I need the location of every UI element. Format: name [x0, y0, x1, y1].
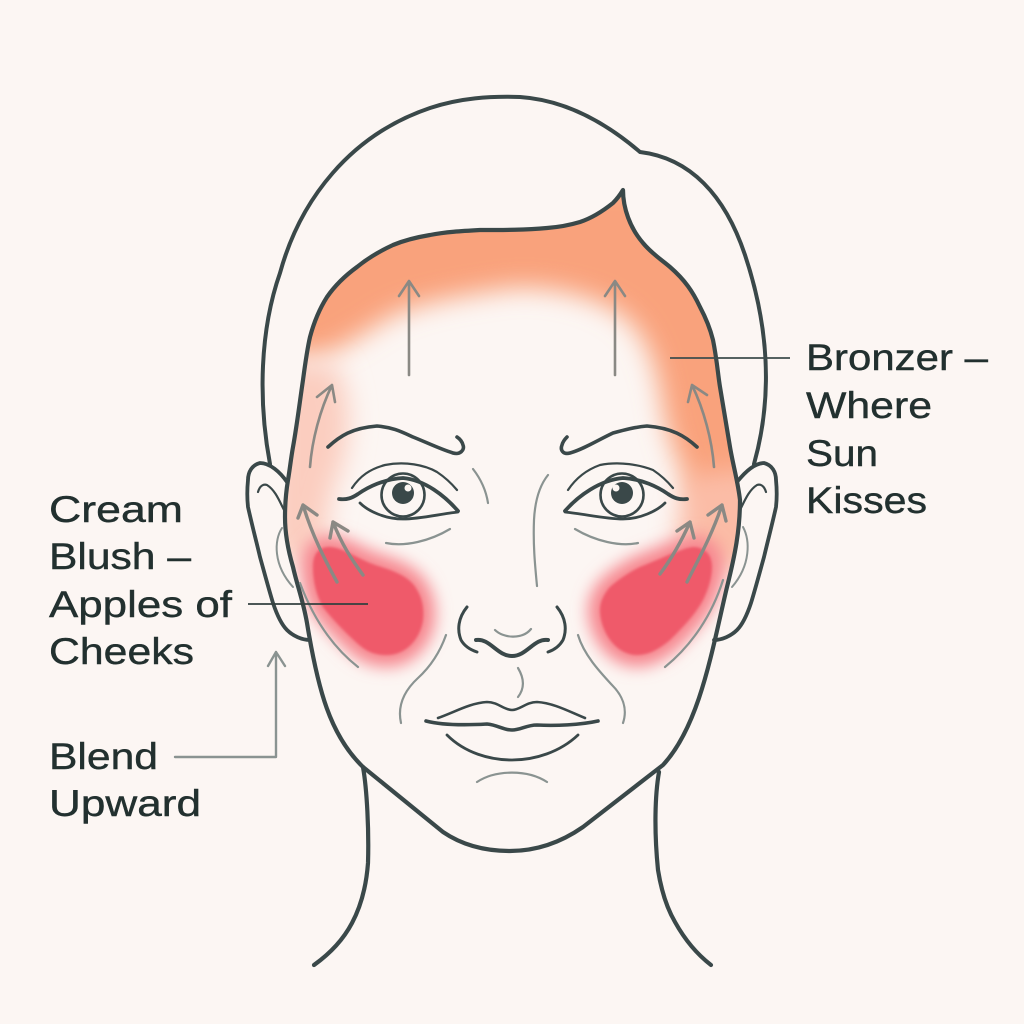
label: bronzer: Bronzer –	[806, 337, 988, 378]
nose	[459, 607, 565, 656]
label: blend upward: Upward	[49, 783, 201, 824]
left eye	[339, 463, 458, 519]
face outline	[285, 190, 740, 851]
label: blend upward	[49, 736, 201, 824]
bronzer zone: forehead and temples	[287, 196, 738, 582]
under-eye and nose-side lines	[300, 469, 723, 782]
blush halo left	[313, 547, 423, 655]
leader line: cream blush	[248, 603, 368, 605]
label: cream blush	[49, 489, 233, 672]
blush halo right	[600, 547, 712, 655]
label: blend upward: Blend	[49, 736, 158, 777]
right eyebrow	[561, 426, 697, 453]
leader line: bronzer	[670, 357, 790, 359]
label: bronzer: Where	[806, 385, 932, 426]
neck	[314, 767, 711, 965]
label: bronzer: Sun	[806, 433, 878, 474]
label: cream blush: Cream	[49, 489, 183, 530]
lips	[426, 702, 598, 760]
blush arrows: cheeks to temples	[298, 505, 726, 582]
left eyebrow	[328, 426, 463, 453]
bronzer arrows: forehead and temples	[310, 281, 714, 467]
cream blush right	[600, 547, 712, 655]
arrow: blend upward	[175, 652, 285, 757]
label: cream blush: Blush –	[49, 536, 191, 577]
hair outline	[263, 97, 766, 464]
cream blush left	[313, 547, 423, 655]
label: bronzer: Kisses	[806, 480, 927, 521]
label: bronzer	[806, 337, 988, 521]
right ear	[714, 463, 777, 640]
label: cream blush: Cheeks	[49, 631, 194, 672]
left ear	[247, 463, 310, 640]
label: cream blush: Apples of	[49, 584, 233, 625]
right eye	[565, 463, 687, 519]
